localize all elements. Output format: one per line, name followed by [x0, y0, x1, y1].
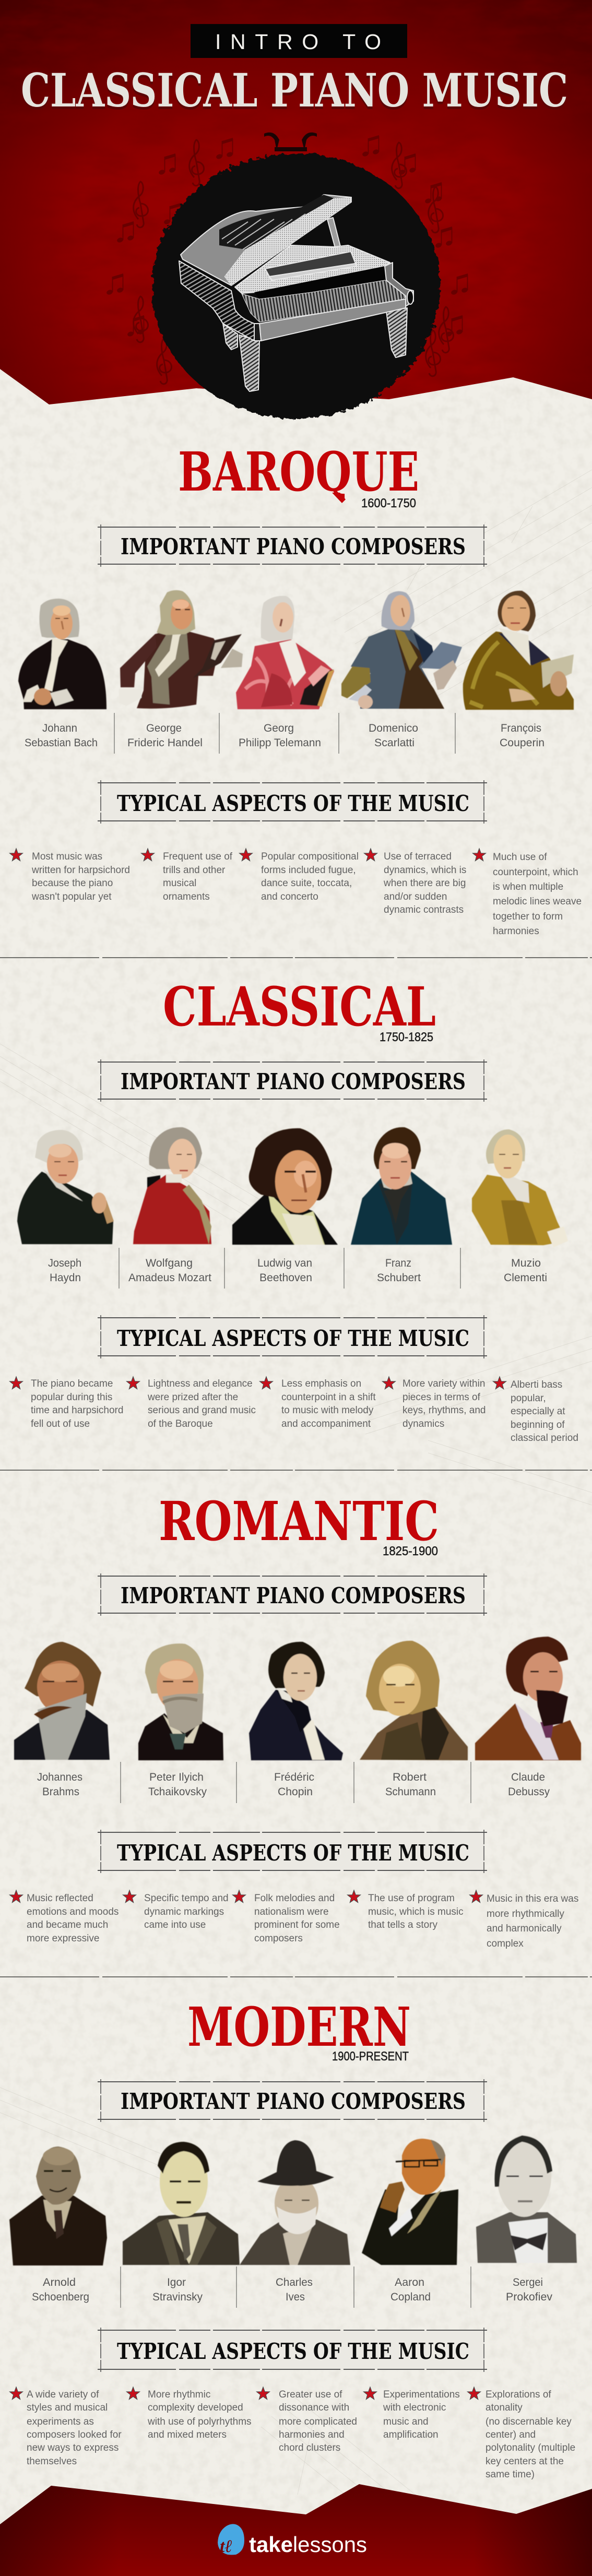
bullet 1: time and harpsichord — [31, 1405, 123, 1416]
bullet 5: center) and — [486, 2429, 536, 2440]
composer names: Peter Ilyich — [149, 1771, 204, 1783]
composer names: Amadeus Mozart — [128, 1272, 211, 1284]
bullet 1: experiments as — [27, 2416, 94, 2427]
bullet 4: with electronic — [383, 2402, 446, 2413]
composer names: Ludwig van — [257, 1257, 312, 1269]
bullet 5: harmonies — [493, 926, 539, 937]
lid dark top — [219, 195, 334, 249]
bullet 5: melodic lines weave — [493, 896, 582, 907]
portrait: Schubert — [351, 1127, 452, 1245]
composer names: Muzio — [511, 1257, 541, 1269]
bullet 2 — [141, 849, 233, 902]
banner: aspects — [98, 1830, 487, 1873]
portrait: Tchaikovsky — [138, 1643, 223, 1760]
bullet 3: Less emphasis on — [281, 1378, 361, 1389]
bullet 2: with use of polyrhythms — [147, 2416, 252, 2427]
composer names: Couperin — [500, 737, 544, 749]
bullet 4: when there are big — [383, 878, 466, 889]
composer names: Ives — [286, 2291, 305, 2303]
composer names: Schoenberg — [32, 2291, 89, 2303]
bullet 3 — [257, 2387, 357, 2453]
composer names: Philipp Telemann — [239, 737, 321, 749]
portrait: Copland — [362, 2139, 458, 2265]
bullet 1: Most music was — [32, 851, 102, 862]
banner: aspects: TYPICAL ASPECTS OF THE MUSIC — [117, 1326, 469, 1351]
bullet 1: written for harpsichord — [31, 865, 130, 876]
banner: composers: IMPORTANT PIANO COMPOSERS — [121, 1583, 466, 1608]
composer names: Prokofiev — [506, 2291, 552, 2303]
side panel — [179, 261, 254, 341]
bullet 4: amplification — [383, 2429, 439, 2440]
bullet 3: forms included fugue, — [261, 865, 356, 876]
bullet 5: popular, — [511, 1393, 546, 1404]
composer names: Robert — [393, 1771, 427, 1783]
lid streaks — [222, 214, 305, 249]
portrait: Schoenberg — [9, 2146, 107, 2265]
heading: classical: CLASSICAL — [163, 975, 436, 1039]
interior — [235, 245, 390, 293]
bullet 1 — [10, 1890, 119, 1944]
bullet 3: Greater use of — [279, 2389, 342, 2400]
composer names: Clementi — [504, 1272, 547, 1284]
banner: aspects: TYPICAL ASPECTS OF THE MUSIC — [117, 1840, 469, 1866]
keyboard cover — [254, 266, 385, 299]
portrait: Bach — [18, 599, 106, 709]
bullet 1: wasn't popular yet — [31, 891, 112, 902]
portrait: Debussy — [475, 1637, 581, 1760]
composer names — [32, 2276, 552, 2303]
bullet 2: Lightness and elegance — [148, 1378, 253, 1389]
bullet 5: polytonality (multiple — [486, 2442, 575, 2453]
bullet 2: of the Baroque — [148, 1418, 213, 1429]
banner: composers: IMPORTANT PIANO COMPOSERS — [121, 1069, 466, 1094]
bullet 5: Much use of — [493, 852, 547, 863]
composer names: Claude — [511, 1771, 545, 1783]
lid — [181, 195, 351, 285]
bullet 2 — [123, 1890, 229, 1930]
bullet 1: A wide variety of — [27, 2389, 99, 2400]
banner: composers — [98, 524, 487, 567]
bullet 3: dissonance with — [279, 2402, 349, 2413]
composer names: François — [501, 722, 541, 734]
bullet 3: to music with melody — [281, 1405, 374, 1416]
bullet 2: were prized after the — [147, 1392, 238, 1403]
composer names: Domenico — [369, 722, 418, 734]
bullet 2 — [127, 2387, 252, 2440]
composer names: Schumann — [385, 1786, 436, 1798]
bullet 3: nationalism were — [254, 1906, 329, 1917]
composer names: Frideric Handel — [127, 737, 203, 749]
portrait: Prokofiev — [476, 2136, 577, 2263]
bullet 2 — [127, 1377, 256, 1429]
composer names — [48, 1257, 547, 1284]
bullet 2: came into use — [144, 1919, 206, 1930]
prop stick — [327, 218, 340, 248]
bullet 4 — [348, 1890, 464, 1930]
bullet 1: themselves — [27, 2456, 77, 2467]
portrait: Schumann — [360, 1641, 468, 1760]
section: romantic — [10, 1490, 581, 1949]
heading: modern: MODERN — [187, 1996, 411, 2059]
composer names: Tchaikovsky — [148, 1786, 207, 1798]
bullet 4 — [383, 1377, 486, 1429]
bullet 1: The piano became — [31, 1378, 113, 1389]
bullet 5: beginning of — [511, 1420, 565, 1430]
keyboard — [242, 280, 406, 322]
composer names: Sebastian Bach — [25, 737, 98, 749]
bullet 2: More rhythmic — [148, 2389, 210, 2400]
bullet 1: emotions and moods — [27, 1906, 119, 1917]
composer names: Johannes — [37, 1771, 82, 1783]
bullet 3 — [233, 1890, 340, 1944]
header: red background — [0, 0, 592, 404]
right arm — [385, 263, 413, 306]
bullet 1: because the piano — [32, 878, 113, 889]
black brush circle — [152, 153, 440, 419]
composer names: Beethoven — [259, 1272, 312, 1284]
portrait: Handel — [119, 590, 243, 709]
bullet 4: dynamic contrasts — [384, 904, 464, 915]
bullet 4: Experimentations — [383, 2389, 460, 2400]
bullet 2: ornaments — [163, 891, 210, 902]
bullet 1: popular during this — [31, 1392, 112, 1403]
title label box — [191, 24, 407, 58]
bullet 3: chord clusters — [279, 2442, 340, 2453]
bullet 3: and concerto — [261, 891, 318, 902]
portrait: Ives — [240, 2140, 350, 2265]
bullet 2: complexity developed — [148, 2402, 243, 2413]
footer band — [0, 2484, 592, 2576]
heading: baroque: BAROQUE — [178, 440, 419, 504]
bullet 4: keys, rhythms, and — [402, 1405, 486, 1416]
music stand — [265, 252, 357, 280]
bullet 2: serious and grand music — [148, 1405, 256, 1416]
banner: composers — [98, 1059, 487, 1102]
bullet 1: more expressive — [27, 1933, 99, 1944]
bullet 3: and accompaniment — [281, 1418, 371, 1429]
composer names: Scarlatti — [374, 737, 415, 749]
logo: takelessons: tℓ — [220, 2537, 232, 2556]
portrait: Scarlatti — [341, 591, 462, 709]
banner: aspects: TYPICAL ASPECTS OF THE MUSIC — [117, 791, 469, 816]
portrait: Stravinsky — [123, 2142, 240, 2265]
dates: 1825-1900 — [383, 1544, 438, 1558]
composer names — [37, 1771, 550, 1798]
portrait: Couperin — [463, 591, 574, 710]
section: modern — [9, 1996, 577, 2480]
banner: aspects — [98, 2328, 487, 2372]
bullet 3: more complicated — [279, 2416, 357, 2427]
bullet 5: Explorations of — [486, 2389, 551, 2400]
bullet 3: Folk melodies and — [254, 1893, 335, 1904]
bullet 5 — [470, 1890, 578, 1949]
bullet 4: that tells a story — [368, 1919, 438, 1930]
bullet 5: is when multiple — [493, 881, 563, 892]
bullet 5: Alberti bass — [511, 1379, 562, 1390]
bullet 5: together to form — [493, 911, 563, 922]
bullet 5: complex — [487, 1938, 524, 1949]
composer names: Johann — [42, 722, 77, 734]
bullet 1: fell out of use — [31, 1418, 90, 1429]
logo: takelessons — [218, 2524, 367, 2557]
composer names: Igor — [167, 2276, 186, 2288]
bullet 3 — [240, 849, 359, 902]
front right leg — [386, 308, 407, 357]
composer names: Franz — [385, 1257, 411, 1269]
bullet 4: pieces in terms of — [402, 1392, 481, 1403]
heading: romantic: ROMANTIC — [159, 1490, 439, 1553]
bullet 5 — [493, 1377, 578, 1444]
top ornament notes — [264, 133, 317, 151]
bullet 4: music and — [383, 2416, 429, 2427]
banner: aspects — [98, 1315, 487, 1358]
bullet 4: dynamics, which is — [384, 865, 466, 876]
bullet 5 — [473, 849, 582, 937]
bullet 4: More variety within — [402, 1378, 485, 1389]
dates: 1900-PRESENT — [332, 2049, 409, 2064]
bullet 2: musical — [163, 878, 196, 889]
bullet 1 — [10, 849, 130, 902]
composer names: Arnold — [43, 2276, 76, 2288]
bullet 3: prominent for some — [254, 1919, 340, 1930]
front rail — [259, 299, 406, 341]
bullet 3: counterpoint in a shift — [281, 1392, 376, 1403]
bullet 4: music, which is music — [368, 1906, 464, 1917]
bullet 5: atonality — [486, 2402, 523, 2413]
composer names: Chopin — [278, 1786, 313, 1798]
composer names: Wolfgang — [146, 1257, 193, 1269]
bullet 5: key centers at the — [486, 2456, 564, 2467]
bullet 5: Music in this era was — [487, 1893, 578, 1904]
dates: 1750-1825 — [380, 1030, 433, 1044]
bullet 1: and became much — [27, 1919, 108, 1930]
bullet 3: composers — [254, 1933, 303, 1944]
bullet 1 — [10, 2387, 122, 2467]
composer names: Sergei — [513, 2276, 543, 2288]
composer names: George — [146, 722, 182, 734]
composer names: Frédéric — [274, 1771, 314, 1783]
composer names: Joseph — [48, 1257, 81, 1269]
composer names — [25, 722, 544, 749]
composer names: Brahms — [42, 1786, 79, 1798]
portrait: Mozart — [133, 1127, 211, 1244]
bullet 4 — [364, 2387, 460, 2440]
music note ornaments around circle — [106, 135, 468, 384]
bullet 5: same time) — [486, 2469, 535, 2480]
bullet 5 — [468, 2387, 575, 2480]
bullet 4: The use of program — [368, 1893, 455, 1904]
banner: aspects: TYPICAL ASPECTS OF THE MUSIC — [117, 2339, 469, 2364]
banner: composers — [98, 1573, 487, 1616]
bullet 2: Frequent use of — [163, 851, 233, 862]
front left leg — [239, 335, 259, 391]
section: classical — [10, 975, 578, 1444]
bullet 5: counterpoint, which — [493, 867, 578, 878]
bullet 2: and mixed meters — [148, 2429, 227, 2440]
composer names: Aaron — [395, 2276, 424, 2288]
portrait: Haydn — [17, 1130, 114, 1244]
bullet 1 — [10, 1377, 123, 1429]
bullet 4: Use of terraced — [384, 851, 452, 862]
portrait: Clementi — [472, 1129, 568, 1247]
bullet 5: more rhythmically — [487, 1909, 564, 1919]
icon: grand piano — [179, 195, 413, 391]
composer names: Debussy — [508, 1786, 550, 1798]
composer names: Copland — [390, 2291, 431, 2303]
bullet 1: composers looked for — [27, 2429, 122, 2440]
composer names: Georg — [264, 722, 294, 734]
portrait: Brahms — [14, 1642, 110, 1760]
back leg — [223, 324, 238, 350]
portrait: Beethoven — [232, 1128, 338, 1245]
composer names: Stravinsky — [152, 2291, 203, 2303]
bullet 3: harmonies and — [279, 2429, 345, 2440]
bullet 2: Specific tempo and — [144, 1893, 229, 1904]
bullet 2: trills and other — [163, 865, 226, 876]
bullet 5: (no discernable key — [486, 2416, 572, 2427]
portrait: Chopin — [249, 1642, 343, 1760]
bullet 4 — [364, 849, 466, 915]
banner: composers: IMPORTANT PIANO COMPOSERS — [121, 534, 466, 559]
bullet 5: especially at — [511, 1406, 565, 1417]
bullet 3 — [260, 1377, 376, 1429]
section: baroque — [10, 440, 582, 937]
composer names: Charles — [276, 2276, 313, 2288]
intro to text: INTRO TO — [215, 30, 381, 54]
composer names: Haydn — [50, 1272, 81, 1284]
bullet 3: dance suite, toccata, — [261, 878, 352, 889]
bullet 5: classical period — [511, 1433, 578, 1444]
bullet 1: styles and musical — [27, 2402, 108, 2413]
portrait: Telemann — [236, 596, 334, 709]
bullet 4: dynamics — [402, 1418, 444, 1429]
bullet 5: and harmonically — [487, 1923, 562, 1934]
icon: blue logo drop — [218, 2524, 244, 2555]
front end — [254, 324, 261, 341]
dates: 1600-1750 — [361, 496, 416, 510]
composer names: Schubert — [377, 1272, 421, 1284]
banner: composers — [98, 2079, 487, 2122]
logo: takelessons: takelessons — [249, 2532, 367, 2557]
bullet 3: Popular compositional — [261, 851, 359, 862]
lid band — [224, 197, 351, 285]
bullet 1: new ways to express — [27, 2442, 119, 2453]
bullet 2: dynamic markings — [144, 1906, 224, 1917]
banner: composers: IMPORTANT PIANO COMPOSERS — [121, 2089, 466, 2114]
banner: aspects — [98, 780, 487, 824]
bullet 4: and/or sudden — [384, 891, 447, 902]
bullet 1: Music reflected — [27, 1893, 93, 1904]
